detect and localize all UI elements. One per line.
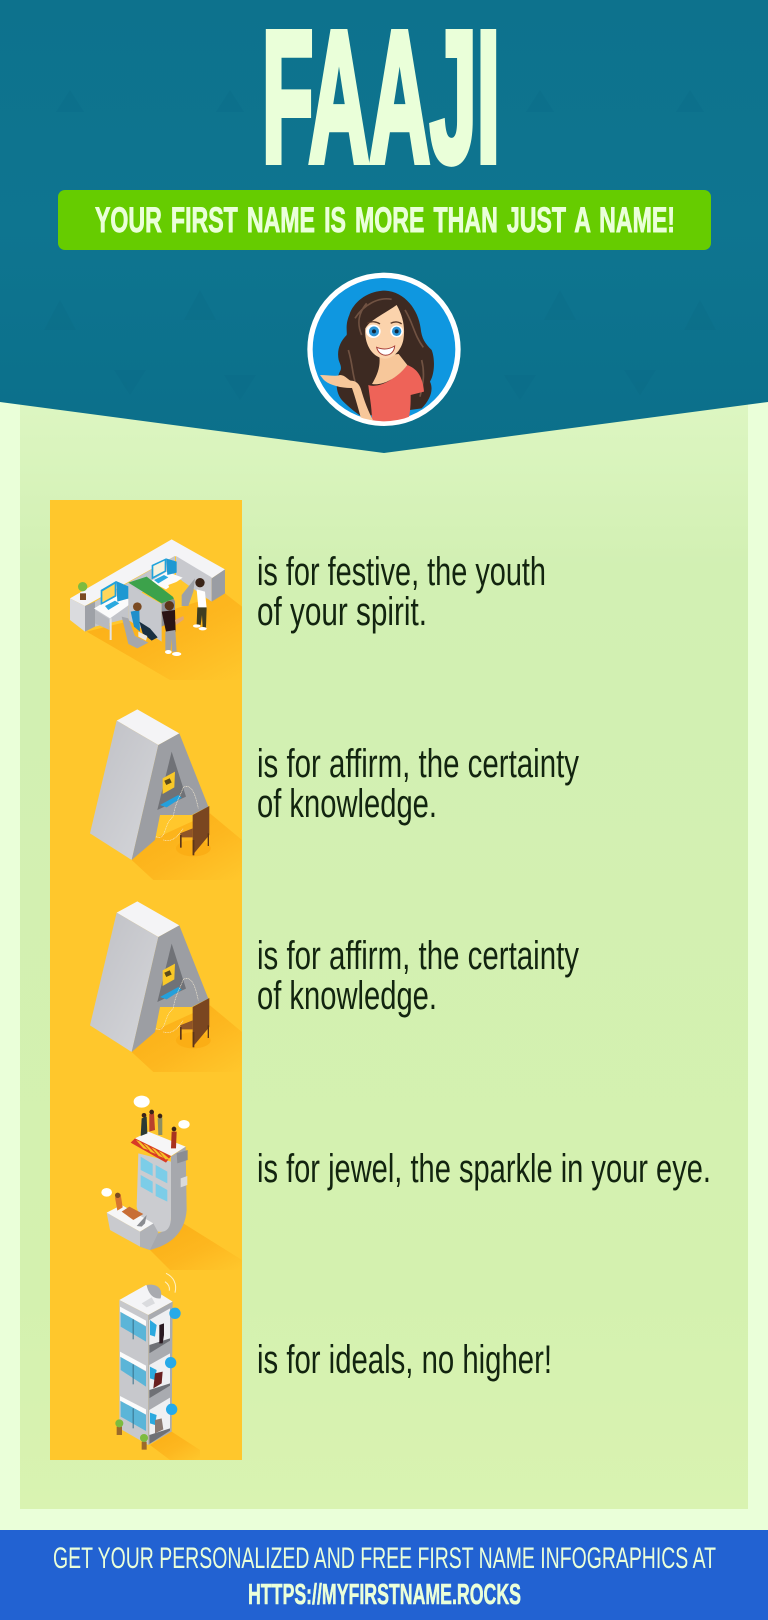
text: A <box>257 742 579 826</box>
panel: yellow illustrations column <box>50 500 242 1460</box>
icon: letter A <box>90 709 242 880</box>
tagline banner <box>58 190 711 250</box>
icon: building I <box>115 1273 200 1460</box>
avatar: woman in circle <box>310 275 458 423</box>
hair <box>337 291 434 417</box>
text: A repeat: of knowledge. <box>257 974 437 1018</box>
mouth <box>377 346 395 355</box>
footer url: HTTPS://MYFIRSTNAME.ROCKS <box>248 1579 521 1611</box>
text: A repeat <box>257 934 579 1018</box>
text: A: is for affirm, the certainty <box>257 742 579 786</box>
text: F <box>257 550 546 634</box>
panel: teal header <box>0 0 768 453</box>
panel: content background <box>20 400 748 1509</box>
text: F: is for festive, the youth <box>257 550 546 594</box>
text: A repeat: is for affirm, the certainty <box>257 934 579 978</box>
shirt <box>368 365 424 423</box>
neck and arm <box>372 354 407 384</box>
text: A: of knowledge. <box>257 782 437 826</box>
eyes and brows <box>366 325 381 338</box>
icon: letter A repeat <box>90 901 242 1072</box>
icon: office F <box>70 539 242 680</box>
face <box>365 305 404 359</box>
text: F: of your spirit. <box>257 590 427 634</box>
icon: letter J <box>101 1096 242 1270</box>
footer <box>0 1530 768 1620</box>
text: I: is for ideals, no higher! <box>257 1338 552 1382</box>
